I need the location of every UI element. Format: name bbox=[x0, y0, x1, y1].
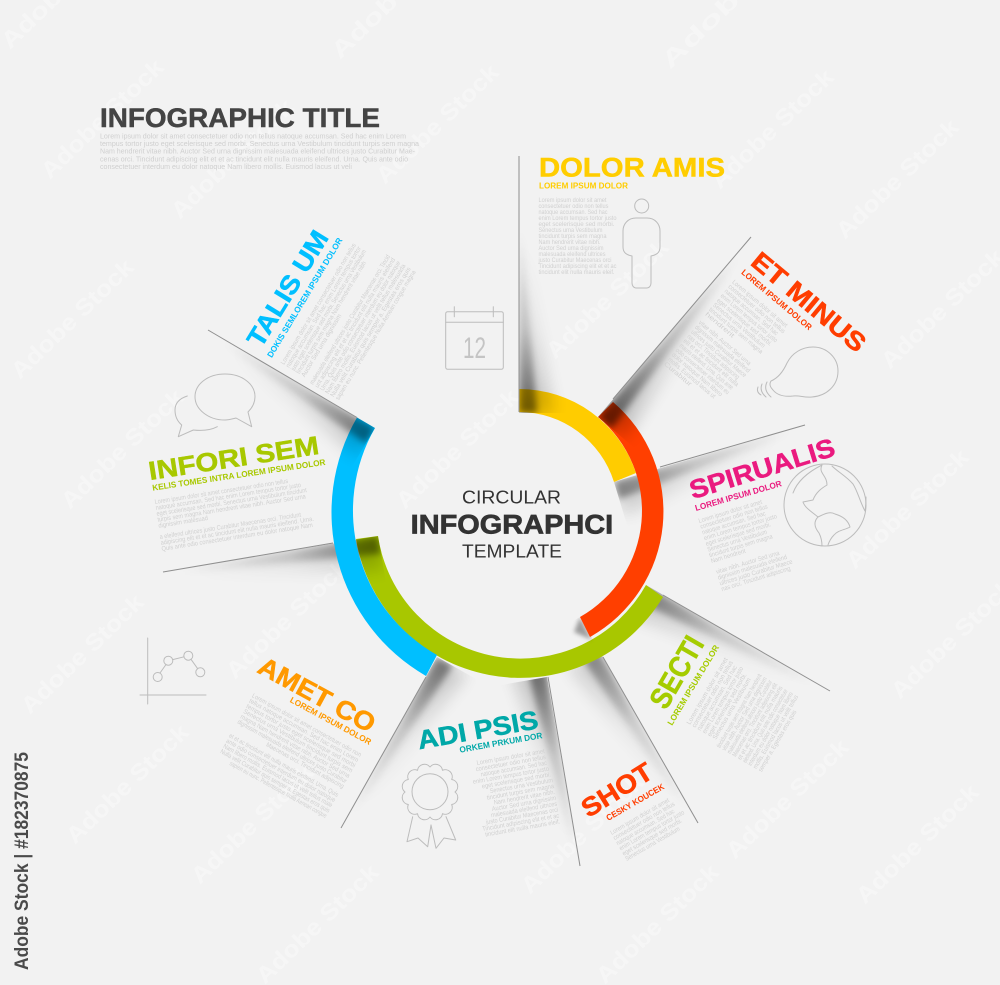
panel: et minus: natoque accumsan. Sed hac bbox=[723, 288, 780, 338]
panel: amet co: magna Nam hendrerit vitae nibh. Auctor Sed urna bbox=[239, 714, 351, 780]
panel: amet co: ante odio consectetuer interdum eu dolor natoque bbox=[225, 738, 337, 804]
watermark pattern: Adobe Stock bbox=[5, 254, 139, 384]
panel: adi psis: ADI PSIS bbox=[415, 704, 540, 755]
panel: adi psis: Nam hendrerit vitae nibh. bbox=[493, 789, 556, 807]
title block: tempus tortor justo eget scelerisque sed morbi. Senectus urna Vestibulum tincidunt turpis sem magna bbox=[100, 139, 420, 148]
panel: amet co: Nam libero mollis. Euismod lacus ut velit tellus male bbox=[222, 743, 334, 809]
watermark pattern: Adobe Stock bbox=[875, 244, 1000, 374]
panel: spirualis bbox=[686, 432, 839, 593]
panel: et minus: Lorem ipsum dolor sit amet bbox=[730, 279, 789, 329]
panel: shot: SHOT bbox=[576, 756, 658, 823]
panel: secti: eleifend. Urna. Quis ante odio consectetuer bbox=[742, 688, 790, 764]
watermark pattern: Adobe Stock bbox=[185, 759, 319, 889]
center heading: TEMPLATE bbox=[462, 540, 562, 561]
panel: amet co: LOREM IPSUM DOLOR bbox=[288, 695, 373, 747]
panel: secti: malesuada eleifend ultrices justo Curabitur bbox=[726, 679, 774, 755]
panel: infori sem: Lorem ipsum dolor sit amet consectetuer odio non tellus bbox=[154, 478, 289, 506]
watermark pattern: Adobe Stock bbox=[370, 59, 504, 189]
watermark pattern: Adobe Stock bbox=[220, 554, 354, 684]
panel: dolor amis: LOREM IPSUM DOLOR bbox=[539, 181, 628, 191]
center heading: CIRCULAR bbox=[462, 486, 561, 507]
panel: shot: eget scelerisque sed morbi. bbox=[621, 817, 684, 858]
watermark pattern: Adobe Stock bbox=[705, 64, 839, 194]
panel: spirualis: LOREM IPSUM DOLOR bbox=[694, 478, 783, 513]
panel: shot bbox=[576, 756, 692, 863]
panel: et minus: Curabitur bbox=[662, 361, 694, 389]
panel: amet co: Senectus urna Vestibulum tincidunt turpis sem bbox=[242, 708, 354, 774]
watermark pattern: Adobe Stock bbox=[60, 719, 194, 849]
panel: secti: semper a. Egestas eros quis bbox=[757, 709, 799, 773]
icon: globe bbox=[784, 464, 866, 546]
panel: adi psis: Senectus urna Vestibulum bbox=[489, 777, 554, 795]
panel: adi psis bbox=[415, 704, 561, 839]
panel: infori sem: adipiscing elit et et ac tincidunt elit nulla mauris eleifend. Urna. bbox=[160, 516, 314, 547]
panel: spirualis: Lorem ipsum dolor sit amet bbox=[698, 499, 763, 525]
panel: spirualis: dignissim malesuada eleifend bbox=[717, 554, 788, 582]
title block: INFOGRAPHIC TITLE bbox=[100, 103, 380, 133]
panel: secti: tincidunt turpis sem magna Nam hendrerit bbox=[716, 673, 764, 749]
panel: spirualis: natoque accumsan. Sed hac bbox=[701, 510, 767, 536]
paper edge lines bbox=[163, 156, 830, 866]
panel: adi psis: Tincidunt adipiscing elit et et ac bbox=[482, 812, 560, 833]
title block: consectetuer interdum eu dolor natoque Nam libero mollis. Euismod lacus ut veli bbox=[100, 162, 352, 171]
panel: talis um: malesuada eleifend ultrices justo Curabitur Maecenas orci. Tincid bbox=[309, 254, 392, 386]
panel: adi psis: malesuada eleifend ultrices bbox=[490, 801, 558, 819]
watermark pattern: Adobe Stock bbox=[540, 234, 674, 364]
shadow over blue segment bbox=[244, 354, 375, 458]
panel: amet co: Maecenas orci. Tincidunt adipiscing bbox=[265, 741, 345, 790]
watermark pattern: Adobe Stock bbox=[515, 769, 649, 899]
stock id label: Adobe Stock | #182370875 bbox=[12, 752, 33, 970]
panel: dolor amis: Senectus urna Vestibulum bbox=[538, 227, 602, 234]
panel: et minus: Senectus urna Vestibulum bbox=[711, 302, 766, 350]
panel: et minus: dignissim malesuada eleifend bbox=[693, 324, 752, 375]
icon: light bulb bbox=[757, 347, 838, 397]
panel: secti: enim Lorem tempus tortor justo bbox=[701, 665, 745, 735]
shadow over yellow segment bbox=[519, 230, 553, 413]
panel: amet co: Nulla velit Curabitur quis semper a. Egestas eros quis bbox=[219, 748, 331, 815]
panel: spirualis: enim Lorem tempus tortor justo bbox=[703, 513, 778, 542]
panel: et minus: elit et et ac tincidunt elit nulla bbox=[682, 338, 740, 388]
icon: speech bubbles bbox=[175, 374, 255, 437]
ring segment: blue bbox=[331, 418, 437, 676]
panel: talis um: Lorem ipsum dolor sit amet consectetuer odio non tellus bbox=[280, 242, 358, 366]
panel: et minus: enim Lorem tempus tortor justo bbox=[719, 293, 779, 344]
panel: dolor amis: Lorem ipsum dolor sit amet bbox=[538, 197, 607, 204]
panel: secti: eget scelerisque sed morbi. bbox=[706, 672, 749, 738]
watermark pattern: Adobe Stock bbox=[35, 54, 169, 184]
panel: adi psis: Auctor Sed urna dignissim bbox=[491, 795, 557, 813]
panel: shot: enim Lorem tempus tortor justo bbox=[618, 809, 686, 852]
watermark pattern: Adobe Stock bbox=[850, 779, 984, 909]
panel: infori sem: turpis sem magna Nam hendrerit vitae nibh. Auctor Sed urna bbox=[157, 493, 307, 524]
panel: amet co: dignissim malesuada eleifend ultrices justo Curabitur bbox=[236, 719, 348, 785]
icon: person bbox=[623, 199, 660, 288]
panel: spirualis: ultrices justo Curabitur Maece bbox=[719, 558, 794, 587]
panel: shot: Lorem ipsum dolor sit amet bbox=[609, 797, 671, 837]
watermark pattern: Adobe Stock bbox=[15, 589, 149, 719]
panel: adi psis: natoque accumsan. Sed hac bbox=[480, 760, 548, 778]
panel: secti: Maecenas orci. Tincidunt adipiscing elit bbox=[731, 682, 779, 758]
panel: spirualis: tincidunt turpis sem magna bbox=[708, 533, 774, 559]
panel: et minus: nas orci. Tincidunt adipiscing bbox=[685, 333, 741, 381]
panel: et minus: consectetuer odio non tellus bbox=[727, 283, 787, 336]
panel: adi psis: Lorem ipsum dolor sit amet bbox=[476, 748, 546, 767]
shadow over green segment, left bbox=[210, 536, 384, 575]
panel: dolor amis: consectetuer odio non tellus bbox=[538, 203, 609, 210]
panel: dolor amis: Auctor Sed urna dignissim bbox=[538, 245, 604, 252]
panel: shot: consectetuer odio non tellus bbox=[612, 801, 677, 842]
panel: amet co: tellus natoque accumsan. Sed hac enim Lorem bbox=[248, 698, 360, 764]
panel: et minus: ultrices justo Curabitur Maece bbox=[689, 329, 748, 379]
watermark pattern: Adobe Stock bbox=[165, 94, 299, 224]
watermark pattern: Adobe bbox=[655, 0, 760, 74]
panel: et minus: mollis. Euismod lacus ut bbox=[666, 356, 717, 400]
panel: talis um: TALIS UM bbox=[241, 225, 335, 352]
panel: talis um: DOKIS SEMLOREM IPSUM DOLOR bbox=[265, 236, 344, 359]
panel: adi psis: tincidunt elit nulla mauris eleif. bbox=[485, 818, 561, 839]
panel: dolor amis: malesuada eleifend ultrices bbox=[538, 251, 606, 258]
panel: infori sem: eget scelerisque sed morbi. Senectus urna Vestibulum tincidunt bbox=[156, 487, 307, 518]
panel: et minus: mauris eleifend. Urna. Quis ante bbox=[678, 342, 735, 392]
icon: award ribbon bbox=[402, 764, 458, 848]
watermark pattern: Adobe Stock bbox=[840, 444, 974, 574]
panel: adi psis: tincidunt turpis sem magna bbox=[486, 783, 555, 802]
panel: talis um: Nulla velit Curabitur quis semper a. Egestas eros quis bbox=[329, 266, 413, 398]
watermark pattern: Adobe Stock bbox=[390, 384, 524, 514]
ring segment: yellow bbox=[519, 389, 636, 482]
panel: et minus: ET MINUS bbox=[745, 246, 872, 358]
shadow at red segment end bbox=[574, 617, 592, 640]
panel: adi psis: justo Curabitur Maecenas orci bbox=[485, 807, 559, 826]
panel: shot: CESKY KOUCEK bbox=[604, 781, 667, 823]
panel: dolor amis: natoque accumsan. Sed hac bbox=[538, 209, 608, 216]
center heading bbox=[411, 486, 613, 561]
panel: dolor amis: Nam hendrerit vitae nibh. bbox=[538, 239, 601, 246]
panel: secti: Lorem ipsum dolor sit amet bbox=[686, 657, 730, 726]
infographic canvas bbox=[14, 108, 866, 970]
panel: dolor amis: tincidunt elit nulla mauris eleif. bbox=[538, 269, 615, 276]
panel: infori sem bbox=[146, 430, 326, 553]
panel: talis um: tincidunt turpis sem magna Nam hendrerit vitae nibh bbox=[295, 260, 368, 375]
panel: dolor amis: tincidunt turpis sem magna bbox=[538, 233, 607, 240]
panel: spirualis: vitae nibh. Auctor Sed urna bbox=[715, 550, 781, 576]
icon: calendar: 12 bbox=[463, 332, 486, 365]
panel: talis um: justo eget scelerisque sed morbi. Senectus urna Vestibulum bbox=[290, 249, 368, 373]
panel: spirualis: nas orci. Tincidunt adipiscing bbox=[721, 565, 792, 593]
panel: amet co: et et ac tincidunt elit nulla mauris eleifend. Urna. Quis bbox=[228, 733, 340, 799]
panel: amet co bbox=[216, 651, 381, 820]
panel: talis um: Nam libero mollis. Euismod lacus ut velit tellus malesuada bbox=[324, 263, 408, 395]
panel: et minus: hendrerit bbox=[703, 311, 736, 340]
panel: talis um: sapien eu nunc. Pellentesque Nulla Aenean congue magna bbox=[334, 269, 418, 401]
panel: secti: mollis. Euismod lacus ut velit tellus bbox=[752, 694, 800, 770]
panel: et minus: dolor natoque Nam libero bbox=[670, 352, 724, 398]
panel: talis um: natoque accumsan. Sed hac enim Lorem tempus tortor bbox=[285, 245, 363, 369]
panel: secti bbox=[643, 630, 806, 773]
panel: infori sem: INFORI SEM bbox=[146, 430, 321, 486]
panel: infori sem: dignissim malesuad bbox=[158, 515, 209, 530]
title block: Lorem ipsum dolor sit amet consectetuer odio non tellus natoque accumsan. Sed hac enim Lorem bbox=[100, 132, 406, 140]
panel: dolor amis: DOLOR AMIS bbox=[539, 153, 725, 183]
panel: talis um: Auctor Sed urna dignissim bbox=[300, 313, 343, 378]
panel: spirualis: consectetuer odio non tellus bbox=[700, 503, 769, 531]
title block: cenas orci. Tincidunt adipiscing elit et et ac tincidunt elit nulla mauris eleifend. Urna. Quis ante odio bbox=[100, 154, 408, 163]
panel: shot: Senectus urna Vestibulum bbox=[624, 826, 681, 863]
panel: amet co: sapien eu nunc. Pellentesque Nulla Aenean congue bbox=[228, 760, 328, 820]
icon: calendar bbox=[446, 307, 503, 369]
panel: infori sem: natoque accumsan. Sed hac enim Lorem tempus tortor justo bbox=[155, 482, 302, 512]
panel: infori sem: a eleifend ultrices justo Curabitur Maecenas orci. Tincidunt bbox=[159, 512, 302, 541]
shadow over red segment bbox=[598, 275, 723, 440]
panel: adi psis: eget scelerisque sed morbi. bbox=[481, 771, 552, 790]
panel: amet co: Lorem ipsum dolor sit amet consectetuer odio non bbox=[251, 693, 363, 759]
panel: spirualis: eget scelerisque sed morbi. bbox=[705, 521, 772, 548]
panel: et minus: eget scelerisque sed morbi. bbox=[715, 297, 773, 348]
icon: line chart bbox=[140, 638, 206, 704]
paper shadows beneath the ring bbox=[341, 425, 830, 866]
panel: dolor amis: eget scelerisque sed morbi. bbox=[538, 221, 615, 228]
panel: secti: consectetuer odio non tellus bbox=[691, 659, 735, 729]
panel: spirualis: Nam hendrerit bbox=[710, 548, 747, 565]
watermark pattern: Adobe Stock bbox=[55, 384, 189, 514]
ring segment: green bbox=[356, 536, 663, 678]
panel: et minus: LOREM IPSUM DOLOR bbox=[739, 267, 814, 332]
panel: adi psis: consectetuer odio non tellus bbox=[475, 754, 547, 773]
panel: et minus: vitae nibh. Auctor Sed urna bbox=[697, 319, 752, 367]
panel: secti: SECTI bbox=[643, 630, 711, 714]
panel: amet co: AMET CO bbox=[253, 651, 381, 739]
watermark pattern: Adobe Stock bbox=[830, 114, 964, 244]
panel: spirualis: SPIRUALIS bbox=[686, 432, 839, 505]
title block: Nam hendrerit vitae nibh. Auctor Sed urna dignissim malesuada eleifend ultrices justo Curabitur Mae- bbox=[100, 147, 415, 156]
panel: secti: vitae nibh. Auctor Sed urna dignissim bbox=[721, 676, 769, 752]
title block bbox=[100, 103, 420, 171]
ring segment: red bbox=[580, 402, 663, 637]
panel: secti: et et ac tincidunt elit nulla mauris bbox=[736, 684, 785, 761]
panel: dolor amis: Tincidunt adipiscing elit et et ac bbox=[538, 263, 617, 270]
panel: secti: interdum eu dolor natoque Nam libero bbox=[747, 691, 795, 767]
panel: dolor amis: enim Lorem tempus tortor justo bbox=[538, 215, 617, 222]
panel: spirualis: Senectus urna Vestibulum bbox=[707, 529, 768, 554]
panel: adi psis: enim Lorem tempus tortor justo bbox=[472, 766, 550, 786]
panel: et minus: tincidunt turpis sem magna bbox=[707, 306, 764, 356]
panel: et minus bbox=[662, 246, 872, 411]
panel: secti: Senectus urna Vestibulum bbox=[712, 677, 753, 741]
watermark pattern: Adobe Stock bbox=[720, 734, 854, 864]
panel: infori sem: Quis ante odio consectetuer interdum eu dolor natoque Nam bbox=[161, 522, 313, 553]
panel: secti: natoque accumsan. Sed hac bbox=[696, 664, 739, 732]
panel: dolor amis bbox=[538, 153, 725, 276]
panel: infori sem: KELIS TOMES INTRA LOREM IPSUM DOLOR bbox=[152, 457, 326, 493]
panel: adi psis: ORKEM PRKUM DOR bbox=[459, 730, 543, 755]
panel: amet co: tempus tortor justo eget scelerisque sed morbi bbox=[245, 703, 357, 769]
panel: secti: LOREM IPSUM DOLOR bbox=[665, 643, 721, 727]
panel: talis um: unt adipiscing elit et et ac tincidunt elit nulla mauris eleifend bbox=[314, 257, 397, 389]
center heading: INFOGRAPHCI bbox=[411, 509, 613, 539]
panel: talis um bbox=[241, 225, 418, 401]
panel: dolor amis: justo Curabitur Maecenas orci bbox=[538, 257, 612, 264]
panel: talis um: Urna. Quis ante odio consectetuer interdum eu dolor natoque bbox=[319, 260, 402, 392]
panel: et minus: odio consectetuer interdum eu bbox=[674, 347, 731, 396]
panel: shot: natoque accumsan. Sed hac bbox=[615, 808, 676, 847]
